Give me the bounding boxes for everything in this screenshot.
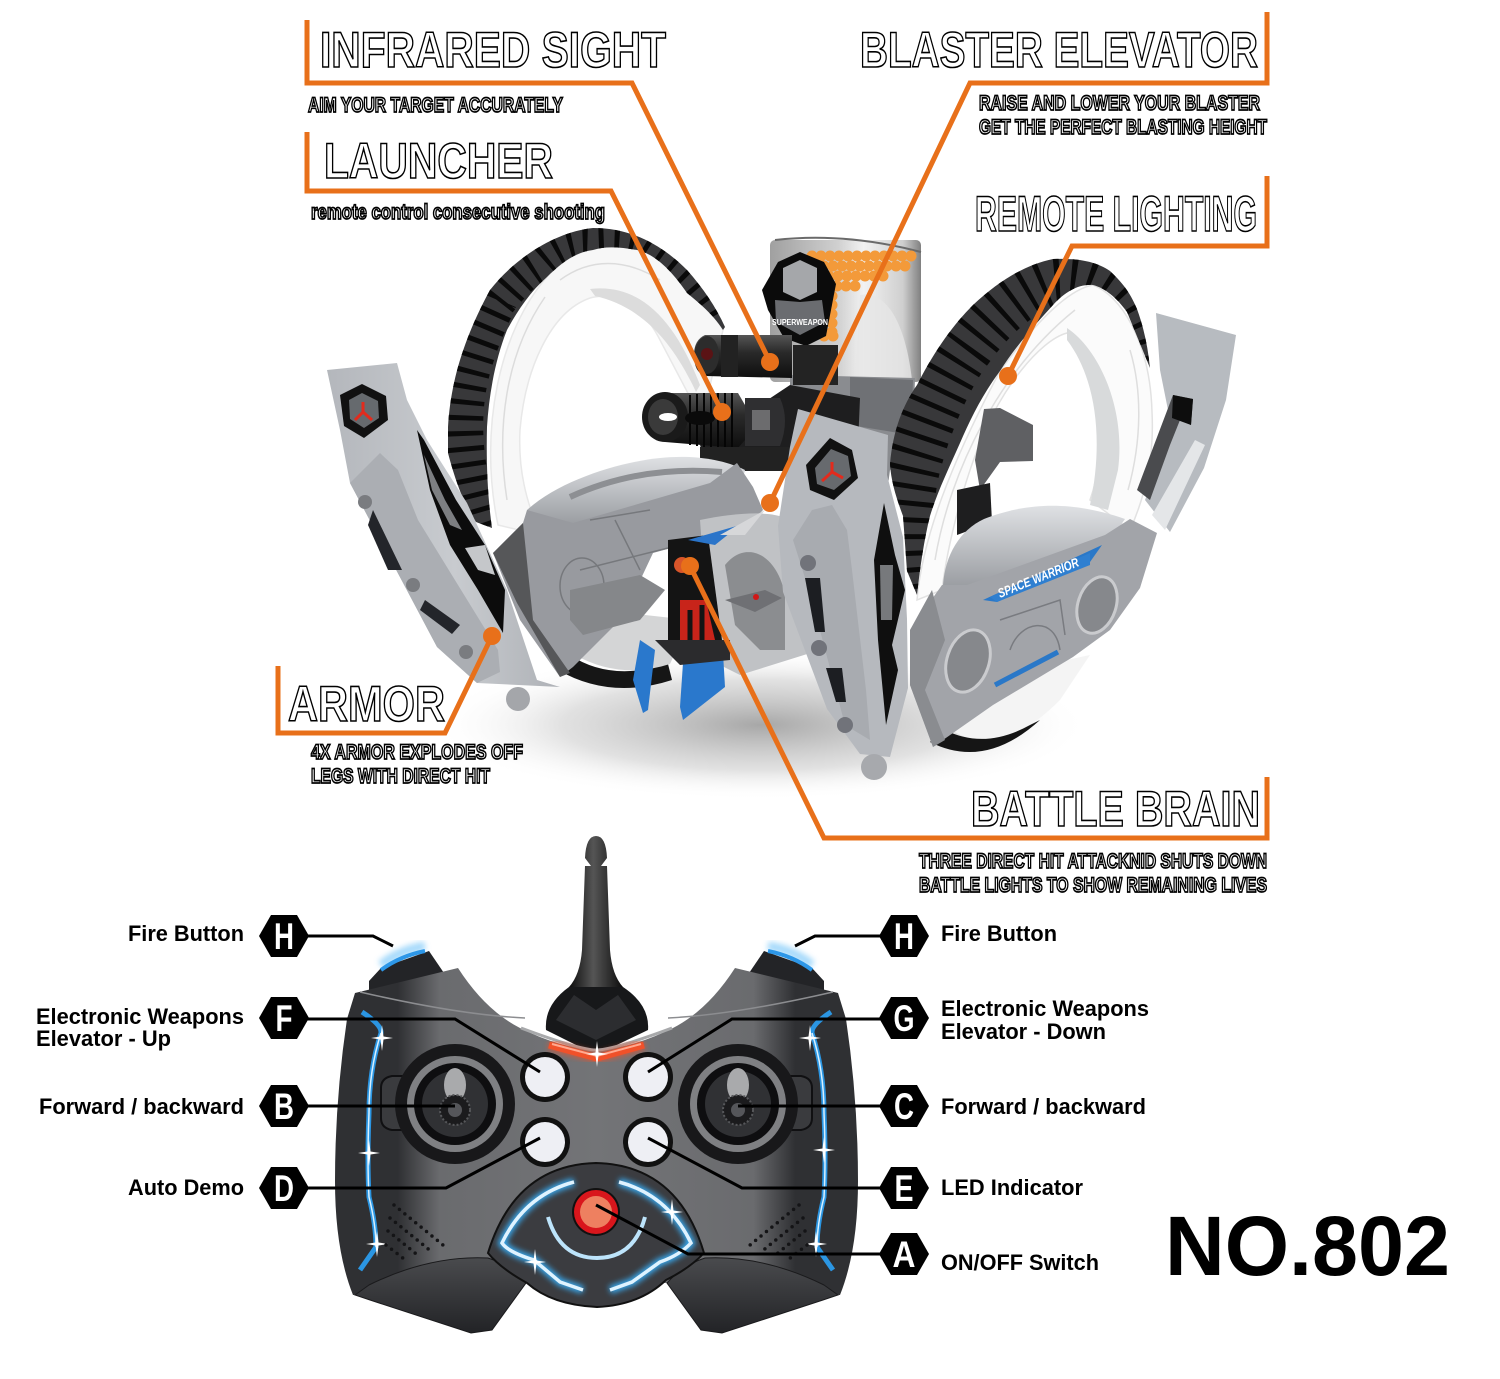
callout: infrared sight — [307, 20, 779, 371]
callout: armor — [278, 627, 523, 788]
center body — [633, 510, 820, 720]
remote controller — [307, 836, 926, 1333]
toy: Space Warrior robot — [327, 220, 1236, 800]
labels right: LED Indicator — [941, 1175, 1083, 1200]
badge C — [879, 1085, 929, 1127]
canister with orange balls — [762, 238, 921, 382]
callout: launcher — [307, 132, 731, 421]
left armor leg — [327, 363, 560, 711]
callout: blaster elevator: RAISE AND LOWER YOUR BLASTER — [979, 92, 1260, 115]
model number: NO.802 — [1165, 1199, 1450, 1293]
right grip — [667, 1258, 838, 1333]
labels left: Elevator - Up — [36, 1026, 171, 1051]
right wheel — [880, 250, 1160, 752]
badge D — [259, 1167, 309, 1209]
badge A: A — [892, 1234, 916, 1275]
badge E — [879, 1167, 929, 1209]
buttons — [520, 1052, 673, 1167]
canister with orange balls: SUPERWEAPON — [772, 318, 828, 327]
trigger left — [369, 946, 446, 990]
controller body — [335, 968, 858, 1295]
ground shadow — [430, 650, 1090, 800]
callout: remote lighting — [975, 176, 1267, 385]
callout: infrared sight: AIM YOUR TARGET ACCURATELY — [308, 94, 563, 117]
left grip — [355, 1258, 526, 1333]
left joystick — [381, 1044, 515, 1164]
labels left: Auto Demo — [128, 1175, 244, 1200]
labels left — [36, 921, 244, 1200]
left fender and side plate — [493, 457, 763, 677]
badge H left — [259, 915, 309, 957]
labels left: Fire Button — [128, 921, 244, 946]
badge A — [879, 1233, 929, 1275]
callout: battle brain: THREE DIRECT HIT ATTACKNID SHUTS DOWN — [919, 850, 1267, 873]
callout: blaster elevator: GET THE PERFECT BLASTING HEIGHT — [979, 116, 1267, 139]
center panel — [488, 1163, 704, 1307]
callout: battle brain — [681, 557, 1267, 897]
callout: armor: 4X ARMOR EXPLODES OFF — [311, 741, 523, 764]
badge B: B — [274, 1086, 294, 1127]
leader lines — [307, 936, 926, 1254]
trigger right — [747, 946, 824, 990]
badge E: E — [894, 1168, 914, 1209]
callout: remote lighting: REMOTE LIGHTING — [975, 186, 1257, 242]
speaker left — [386, 1205, 443, 1262]
rear armor — [1137, 313, 1236, 532]
badge H right — [879, 915, 929, 957]
right joystick — [678, 1044, 812, 1164]
callout: launcher: LAUNCHER — [324, 133, 553, 189]
badge F: F — [276, 998, 292, 1039]
side light bars — [360, 1012, 833, 1270]
badge F — [259, 997, 309, 1039]
antenna — [546, 836, 648, 1055]
labels left: Electronic Weapons — [36, 1004, 244, 1029]
right fender and side plate — [910, 506, 1157, 747]
left wheel — [440, 220, 740, 688]
callout: battle brain: BATTLE LIGHTS TO SHOW REMAINING LIVES — [919, 874, 1267, 897]
callout: battle brain: BATTLE BRAIN — [971, 781, 1260, 837]
callout: infrared sight: INFRARED SIGHT — [320, 22, 666, 78]
labels right — [941, 921, 1149, 1275]
badge H right: H — [894, 916, 914, 957]
sparkles — [358, 1025, 835, 1275]
labels right: Fire Button — [941, 921, 1057, 946]
speaker right — [750, 1205, 807, 1262]
labels right: ON/OFF Switch — [941, 1250, 1099, 1275]
callout: blaster elevator — [761, 12, 1267, 512]
gun mount tower — [700, 375, 915, 620]
red LED strip — [521, 1028, 672, 1058]
labels right: Forward / backward — [941, 1094, 1146, 1119]
labels right: Elevator - Down — [941, 1019, 1106, 1044]
right fender and side plate: SPACE WARRIOR — [996, 554, 1081, 601]
badge H left: H — [274, 916, 294, 957]
launcher barrel — [642, 392, 790, 471]
infrared sight — [694, 335, 838, 385]
badge C: C — [894, 1086, 914, 1127]
labels left: Forward / backward — [39, 1094, 244, 1119]
callout: armor: ARMOR — [288, 676, 445, 732]
callout: armor: LEGS WITH DIRECT HIT — [311, 765, 490, 788]
callout: launcher: remote control consecutive shooting — [311, 201, 605, 224]
badge G — [879, 997, 929, 1039]
front right armor leg — [778, 409, 908, 780]
labels right: Electronic Weapons — [941, 996, 1149, 1021]
badge G: G — [894, 998, 914, 1039]
badge D: D — [274, 1168, 294, 1209]
callout: blaster elevator: BLASTER ELEVATOR — [860, 22, 1258, 78]
badge B — [259, 1085, 309, 1127]
